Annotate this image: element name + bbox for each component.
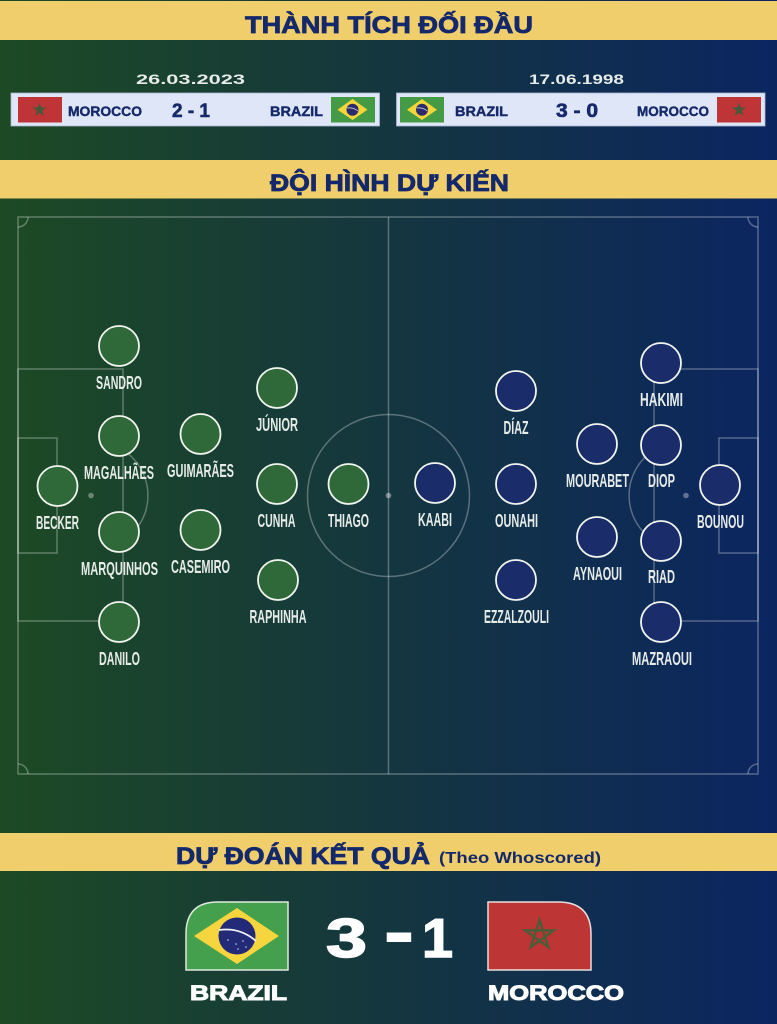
player: Diop	[641, 425, 681, 491]
icon: Brazil flag	[186, 902, 288, 970]
player: Sandro: SANDRO	[96, 373, 142, 393]
player: Mourabet	[566, 424, 629, 491]
player: Kaabi: KAABI	[418, 510, 452, 530]
player: Mazraoui	[632, 602, 692, 669]
player: Díaz	[496, 371, 536, 438]
player: Thiago	[328, 464, 369, 531]
predicted score	[326, 886, 453, 975]
player: Casemiro	[171, 510, 230, 577]
heading: result prediction: DỰ ĐOÁN KẾT QUẢ	[176, 841, 430, 870]
match result: 26.03.2023: 26.03.2023	[136, 71, 245, 87]
match result: 17.06.1998: 3 - 0	[556, 101, 598, 122]
player: Ezzalzouli: EZZALZOULI	[484, 607, 549, 627]
match result: 26.03.2023: 2 - 1	[172, 101, 210, 122]
player: Hakimi	[640, 343, 683, 410]
heading: head to head: THÀNH TÍCH ĐỐI ĐẦU	[245, 11, 533, 39]
player: Júnior: JÚNIOR	[256, 414, 298, 435]
match result: 17.06.1998: MOROCCO	[637, 104, 709, 119]
match result: 17.06.1998	[396, 71, 765, 126]
player: Magalhães	[84, 416, 154, 483]
player: Diop: DIOP	[648, 471, 675, 491]
football pitch lines	[18, 217, 758, 774]
heading: head to head	[0, 1, 777, 40]
player: Cunha: CUNHA	[258, 511, 296, 531]
predicted score: 1	[422, 907, 453, 969]
match result: 26.03.2023: MOROCCO	[68, 104, 142, 119]
player: Guimarães	[167, 414, 234, 481]
player: Riad: RIAD	[648, 567, 675, 587]
player: Hakimi: HAKIMI	[640, 390, 683, 410]
player: Becker: BECKER	[36, 513, 79, 533]
player: Becker	[36, 466, 79, 533]
heading: result prediction	[0, 833, 777, 871]
player: Magalhães: MAGALHÃES	[84, 462, 154, 483]
label: Brazil: BRAZIL	[190, 982, 287, 1005]
player: Díaz: DÍAZ	[504, 417, 528, 438]
heading: expected lineup	[0, 160, 777, 198]
player: Thiago: THIAGO	[328, 511, 369, 531]
player: Danilo: DANILO	[99, 649, 140, 669]
player: Marquinhos	[81, 512, 158, 579]
player: Riad	[641, 521, 681, 587]
player: Raphinha: RAPHINHA	[250, 607, 306, 627]
player: Danilo	[99, 602, 140, 669]
player: Bounou	[697, 465, 744, 532]
match result: 26.03.2023	[11, 71, 380, 126]
player: Júnior	[256, 368, 298, 435]
label: Morocco: MOROCCO	[488, 982, 624, 1005]
heading: result prediction: (Theo Whoscored)	[439, 850, 601, 867]
match result: 26.03.2023: BRAZIL	[270, 104, 323, 119]
player: Guimarães: GUIMARÃES	[167, 460, 234, 481]
predicted score: 3	[326, 907, 367, 969]
icon: Morocco flag	[488, 902, 591, 970]
player: Raphinha	[250, 560, 306, 627]
heading: expected lineup: ĐỘI HÌNH DỰ KIẾN	[270, 169, 509, 197]
match result: 17.06.1998: 17.06.1998	[529, 71, 624, 87]
player: Sandro	[96, 326, 142, 393]
player: Mourabet: MOURABET	[566, 471, 629, 491]
predicted score: -	[383, 886, 415, 975]
match result: 17.06.1998: BRAZIL	[455, 104, 508, 119]
player: Ounahi	[495, 464, 538, 531]
player: Casemiro: CASEMIRO	[171, 557, 230, 577]
player: Bounou: BOUNOU	[697, 512, 744, 532]
player: Aynaoui: AYNAOUI	[573, 564, 622, 584]
player: Ounahi: OUNAHI	[495, 511, 538, 531]
player: Cunha	[257, 464, 297, 531]
player: Aynaoui	[573, 517, 622, 584]
player: Marquinhos: MARQUINHOS	[81, 559, 158, 579]
player: Ezzalzouli	[484, 560, 549, 627]
player: Mazraoui: MAZRAOUI	[632, 649, 692, 669]
player: Kaabi	[415, 463, 455, 530]
